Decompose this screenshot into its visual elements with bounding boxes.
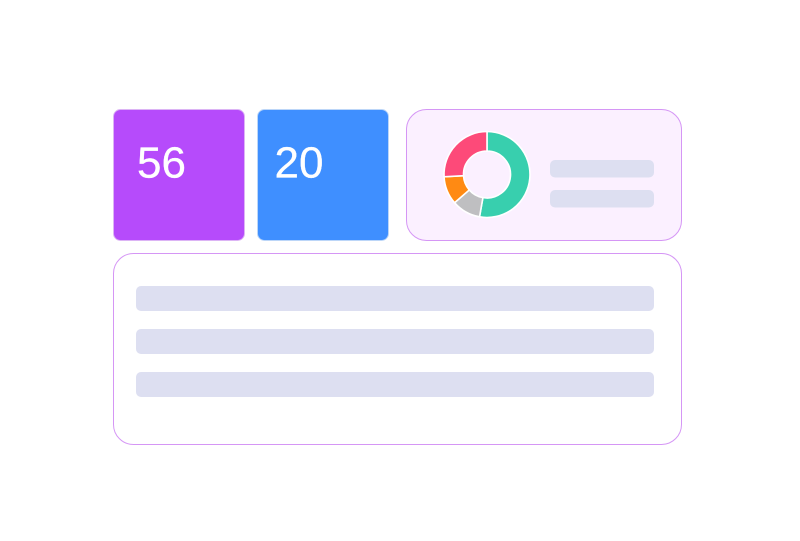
segment: gray	[455, 190, 483, 217]
legend placeholder bar 1	[550, 160, 654, 178]
number: 20: 20	[274, 138, 323, 188]
segment: teal	[480, 132, 530, 217]
number: 56: 56	[137, 138, 186, 188]
list row 1	[136, 286, 654, 311]
segment: orange	[444, 176, 469, 203]
panel: donut chart summary	[406, 110, 682, 240]
list row 3	[136, 372, 654, 397]
donut chart	[444, 132, 530, 217]
panel: list placeholder	[114, 254, 682, 444]
legend placeholder bar 2	[550, 190, 654, 208]
segment: pink	[444, 132, 487, 177]
stat card: blue 20	[258, 110, 388, 240]
list row 2	[136, 329, 654, 354]
stat card: purple 56	[114, 110, 244, 240]
